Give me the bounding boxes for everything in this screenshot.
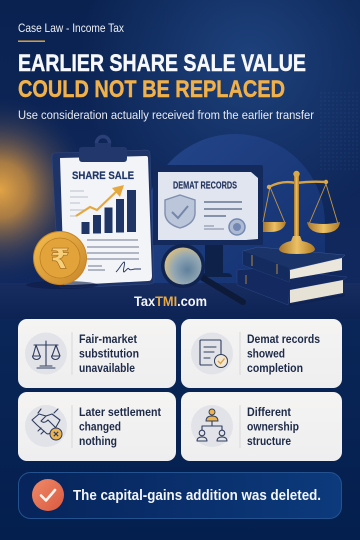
card text: Later settlement bbox=[79, 405, 161, 419]
arch backdrop bbox=[145, 134, 325, 283]
illustration: hero scene bbox=[0, 134, 360, 319]
icon: check badge bbox=[32, 479, 64, 511]
shield icon bbox=[165, 195, 195, 228]
card text bbox=[247, 332, 320, 375]
title bbox=[18, 50, 306, 103]
card text bbox=[79, 332, 139, 375]
icon: scales bbox=[32, 341, 60, 368]
card text: ownership bbox=[247, 420, 299, 434]
card: later settlement bbox=[18, 392, 176, 461]
stacked law books bbox=[237, 247, 347, 306]
lower book bbox=[237, 268, 347, 306]
card text: nothing bbox=[79, 434, 117, 448]
monitor: demat records bbox=[153, 165, 263, 277]
card text bbox=[247, 405, 299, 448]
icon: document with check bbox=[200, 340, 228, 368]
document text lines bbox=[87, 240, 139, 270]
decorative text lines bbox=[70, 191, 88, 216]
rupee coin bbox=[26, 231, 98, 289]
post bbox=[294, 176, 299, 242]
trend arrow bbox=[76, 185, 124, 216]
document heading: SHARE SALE bbox=[72, 170, 134, 182]
clipboard: share sale document bbox=[52, 136, 154, 288]
chains bbox=[263, 184, 338, 224]
conclusion text: The capital-gains addition was deleted. bbox=[73, 488, 321, 504]
floor bbox=[0, 283, 360, 319]
card text: Different bbox=[247, 405, 291, 419]
base bbox=[279, 236, 315, 254]
card: fair-market substitution bbox=[18, 319, 176, 388]
subtitle: Use consideration actually received from the earlier transfer bbox=[18, 108, 314, 122]
card text: changed bbox=[79, 420, 121, 434]
eyebrow: category: Case Law - Income Tax bbox=[18, 22, 124, 35]
monitor heading: DEMAT RECORDS bbox=[173, 180, 237, 192]
card text: showed bbox=[247, 346, 285, 360]
title: COULD NOT BE REPLACED bbox=[18, 76, 285, 103]
icon: org chart bbox=[197, 409, 227, 441]
card: ownership structure bbox=[181, 392, 342, 461]
card text: unavailable bbox=[79, 361, 135, 375]
clip bbox=[79, 136, 127, 162]
card: demat records bbox=[181, 319, 342, 388]
card text: Fair-market bbox=[79, 332, 137, 346]
signature bbox=[116, 262, 141, 272]
bar chart bbox=[82, 190, 136, 234]
seal bbox=[229, 219, 245, 235]
card text: substitution bbox=[79, 346, 139, 360]
card text: completion bbox=[247, 361, 303, 375]
icon: handshake with cross bbox=[32, 409, 62, 440]
rupee coin: ₹ bbox=[50, 242, 70, 276]
card text: structure bbox=[247, 434, 291, 448]
balance scales bbox=[263, 171, 340, 254]
accent rule bbox=[18, 40, 45, 42]
card text bbox=[79, 405, 161, 448]
beam bbox=[269, 182, 326, 187]
record lines bbox=[204, 202, 242, 229]
brand: TaxTMI.com: TaxTMI.com bbox=[134, 294, 207, 309]
card text: Demat records bbox=[247, 332, 320, 346]
upper book bbox=[243, 247, 345, 282]
magnifying glass bbox=[161, 244, 243, 302]
conclusion banner bbox=[18, 472, 342, 518]
pans bbox=[263, 222, 286, 232]
